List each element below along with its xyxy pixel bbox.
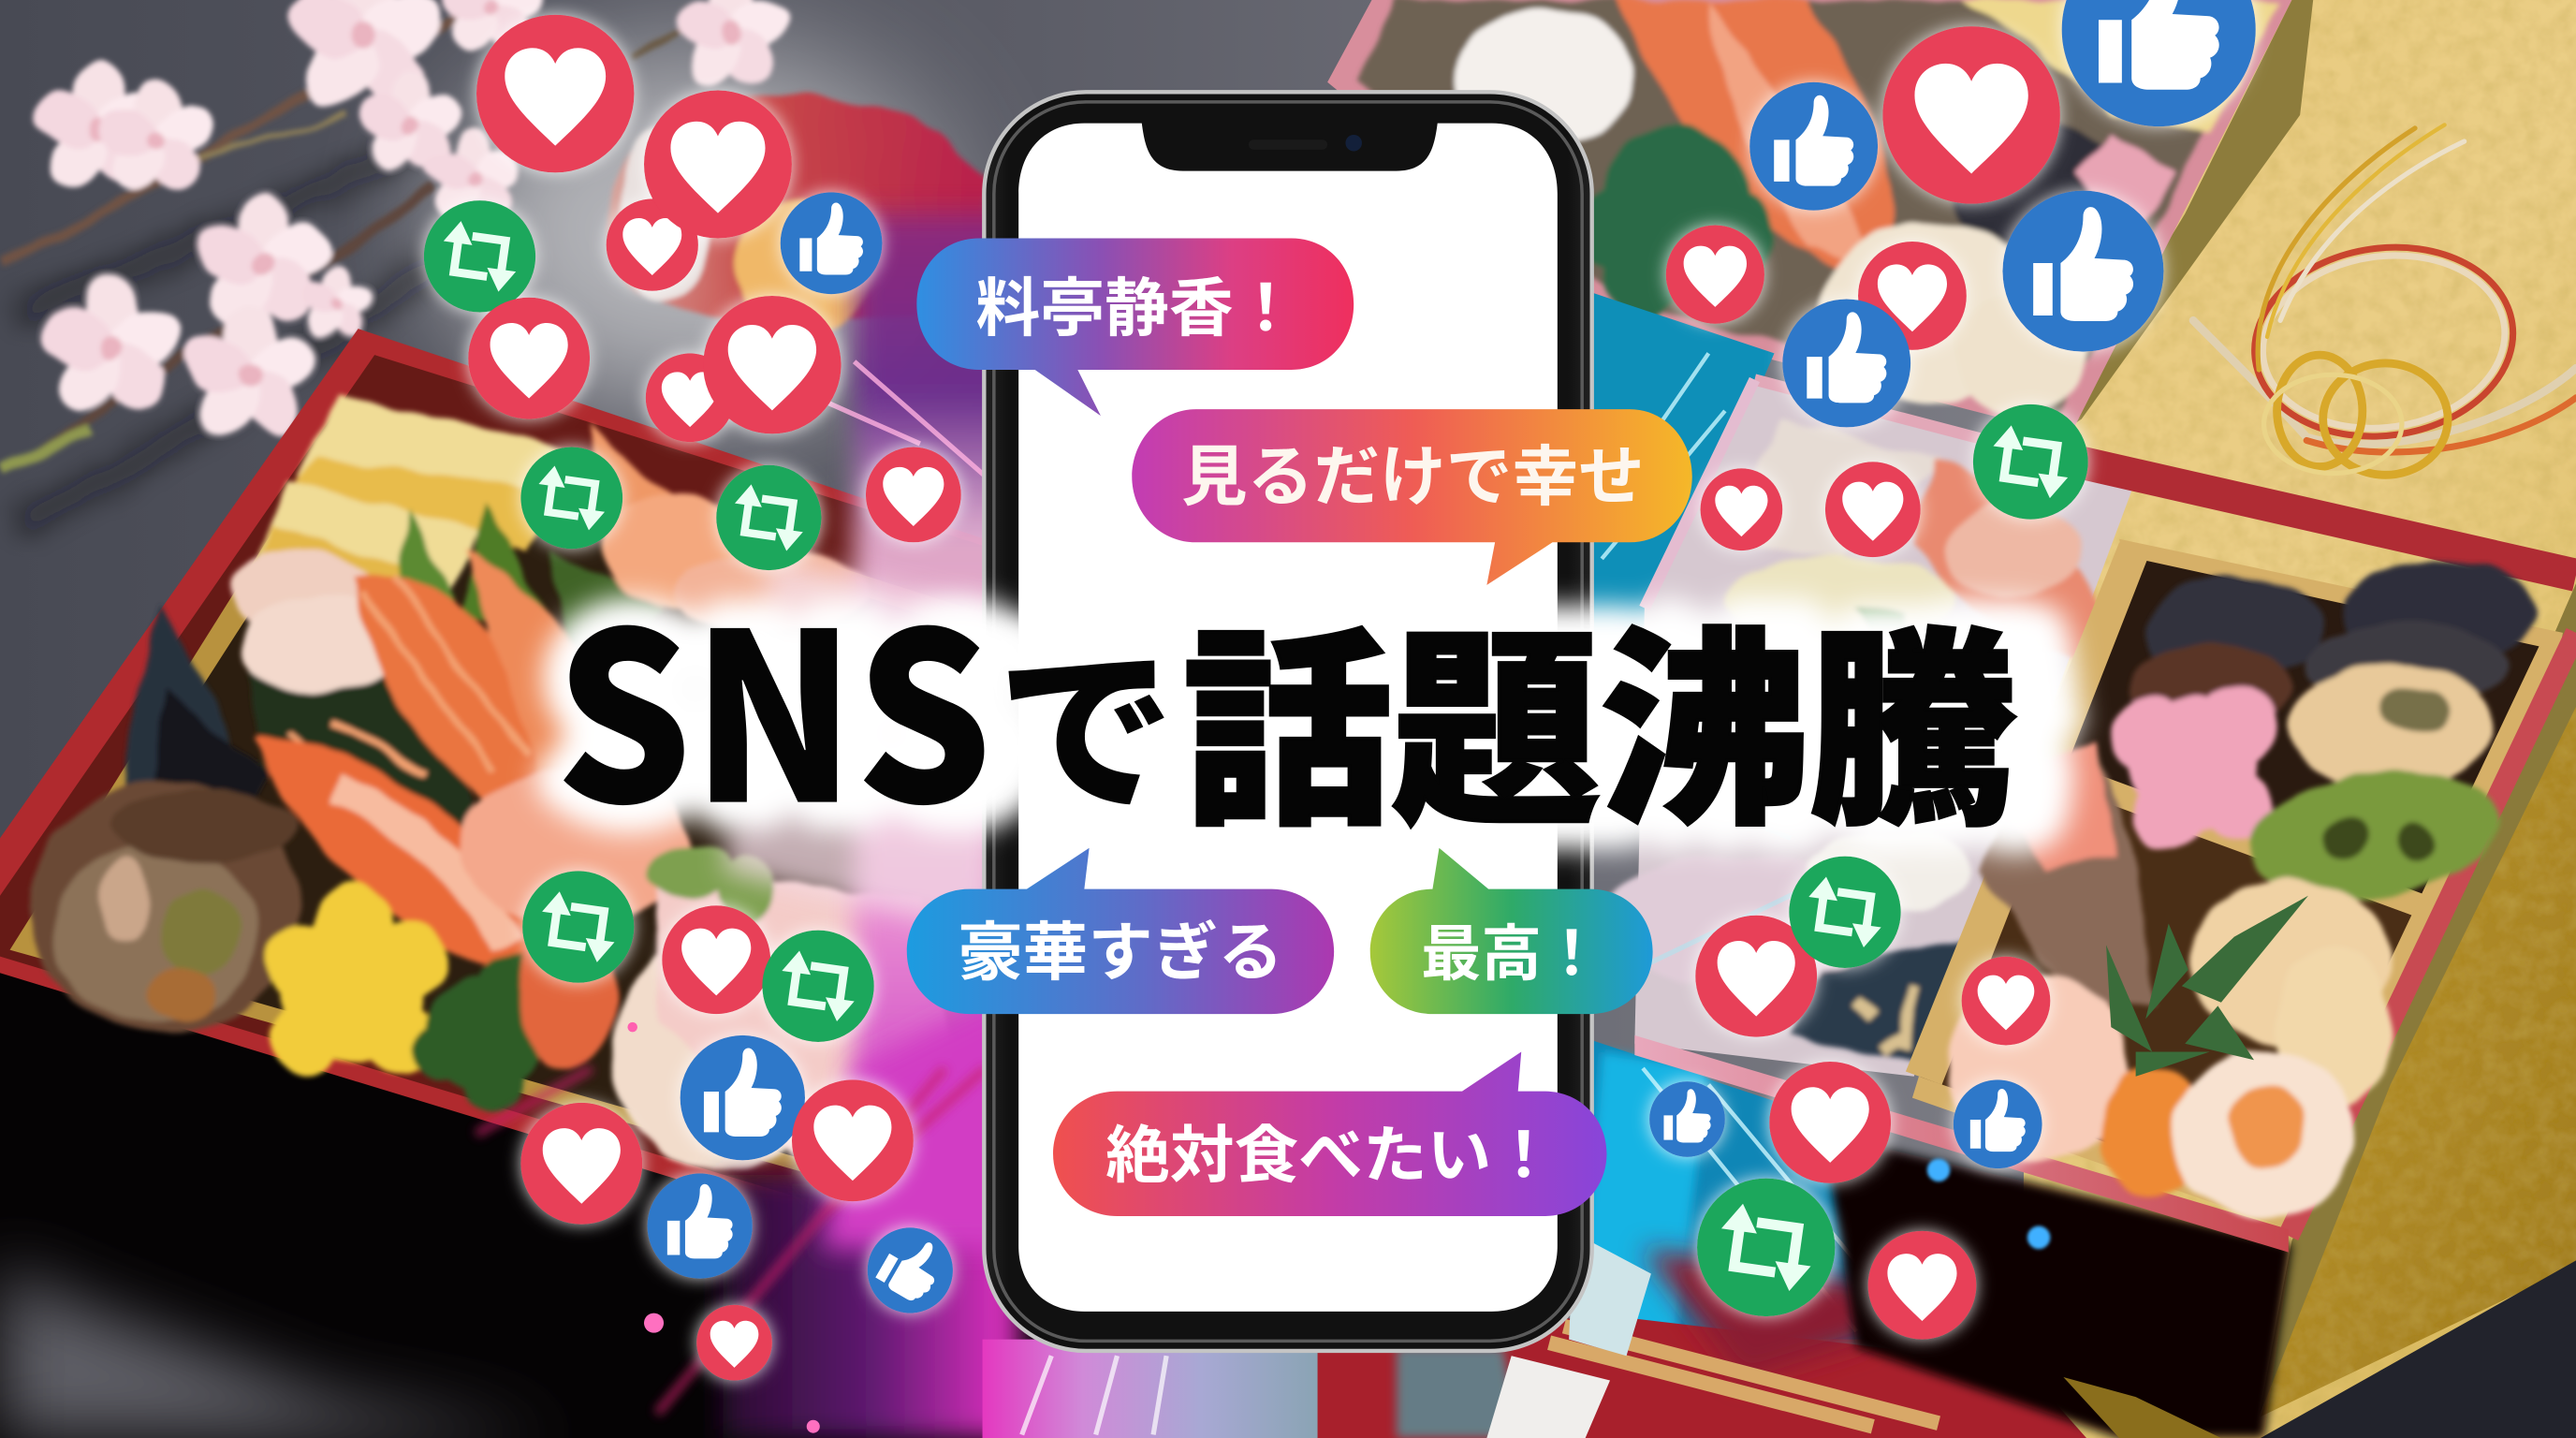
title: で [997, 590, 1175, 847]
box rim [0, 329, 1068, 1299]
reaction icons: left lower cluster [520, 871, 969, 1381]
icon: heart [520, 1103, 642, 1225]
rim bottom [1634, 1035, 2289, 1253]
reaction icons: left upper cluster [424, 15, 961, 570]
speech bubble 絶対食べたい [1053, 1051, 1606, 1216]
meat roll [30, 783, 299, 1032]
rim left pale [1645, 380, 1754, 609]
icon: heart [1825, 462, 1921, 557]
kamaboko [1822, 222, 2039, 403]
gold paper [2021, 0, 2576, 1438]
title: 話題沸騰 [1183, 561, 2017, 866]
icon: heart [1695, 916, 1817, 1037]
upper compartment [2056, 550, 2550, 907]
icon: heart [792, 1079, 914, 1201]
tamago top [1963, 0, 2284, 131]
speech bubble 豪華すぎる [907, 848, 1334, 1014]
lacquer bowl [607, 95, 986, 337]
icon: thumbs up [681, 1035, 805, 1160]
cyan rim highlight [1602, 772, 1808, 986]
speech bubble 最高: 最高！ [1421, 904, 1602, 992]
icon: heart [468, 298, 590, 419]
pink flower [2113, 689, 2277, 850]
icon: heart [1882, 26, 2060, 204]
galaxy glow: left of phone [476, 213, 1318, 1438]
dark fish [124, 605, 246, 805]
smartphone [984, 92, 1592, 1351]
white dish [1454, 10, 1634, 148]
shrimp balls [230, 549, 374, 635]
yellow flower carrot [266, 884, 446, 1078]
icon: heart [866, 447, 961, 542]
foods [30, 394, 970, 1183]
bottom of table: red mat and chopsticks [1318, 1233, 2086, 1438]
speech bubble 絶対食べたい: 絶対食べたい！ [1105, 1106, 1556, 1196]
pale left food area [1634, 380, 2136, 1077]
icon: retweet [1789, 857, 1901, 968]
reaction icons: right upper cluster [1666, 0, 2256, 557]
shrimp and meat [1980, 740, 2156, 1005]
icon: thumbs up tilted [852, 1212, 969, 1328]
right upper bento box [1327, 0, 2291, 435]
reaction icons: right lower cluster [1649, 857, 2050, 1340]
bottom centre lilac streak [983, 1340, 1318, 1438]
orange prawn [353, 573, 592, 840]
green vegetable [2243, 756, 2505, 914]
icon: thumbs up [648, 1173, 753, 1279]
speech bubble 豪華すぎる: 豪華すぎる [958, 901, 1283, 993]
speaker and camera [1249, 135, 1362, 151]
left bento box [0, 329, 1068, 1438]
gold mizuhiki cord [2193, 125, 2576, 475]
seafood and egg in lower compartment [2190, 879, 2393, 1044]
small gold paper triangle [2063, 1377, 2221, 1438]
parsley [411, 953, 546, 1111]
big prawn [255, 739, 550, 971]
pink prawn upper [588, 420, 788, 618]
title halo: kanji: で話題沸騰 [1005, 561, 2056, 866]
rim right [2289, 633, 2576, 1236]
title: white halo: SNS [555, 532, 1032, 870]
icon: retweet [1697, 1179, 1835, 1316]
icon: retweet [424, 200, 535, 313]
icon: heart [696, 1305, 772, 1381]
icon: retweet [716, 465, 822, 570]
box front [0, 961, 1051, 1438]
icon: heart [1868, 1231, 1976, 1340]
icon: heart [703, 296, 842, 433]
title: SNS [555, 532, 992, 870]
sushi rolls [2144, 575, 2324, 681]
cyan galaxy glow: right of phone [1577, 287, 1873, 1340]
tamago roll [2289, 664, 2492, 789]
icon: heart [1962, 957, 2050, 1045]
speech bubble 見るだけで幸せ: 見るだけで幸せ [1181, 425, 1645, 520]
speech bubble 見るだけで幸せ [1132, 409, 1692, 585]
gold dividers [1906, 539, 2576, 1227]
parsley right [1575, 125, 1775, 319]
icon: heart [1858, 242, 1967, 350]
garnish [648, 844, 774, 920]
box front [1823, 1134, 2291, 1438]
background: pale haze behind upper-left icons [444, 50, 936, 411]
icon: retweet [522, 871, 634, 983]
lower compartment [1919, 783, 2435, 1213]
icon: retweet [520, 447, 622, 549]
tamago egg rolls [299, 394, 567, 526]
icon: heart [607, 198, 698, 291]
right main bento box [1602, 380, 2576, 1438]
icon: thumbs up [2062, 0, 2256, 126]
icon: retweet [762, 931, 874, 1042]
icon: heart [476, 15, 634, 172]
icon: thumbs up [1649, 1081, 1725, 1157]
icon: heart [662, 905, 770, 1014]
title [555, 532, 2017, 870]
green leaves [386, 509, 468, 657]
speech bubble 料亭静香 [916, 239, 1354, 416]
icon: thumbs up [2002, 191, 2163, 352]
icon: thumbs up [1749, 82, 1878, 211]
phone screen [1018, 124, 1558, 1312]
icon: retweet [1973, 404, 2088, 520]
icon: thumbs up [1954, 1079, 2042, 1168]
icon: heart [644, 91, 792, 239]
salmon and pale seafood [460, 768, 690, 925]
shrimp top [1618, 0, 1894, 271]
dark sushi [1952, 120, 2123, 258]
icon: heart [646, 353, 735, 442]
icon: heart [1769, 1062, 1891, 1183]
icon: thumbs up [1782, 299, 1910, 427]
rim top [1754, 380, 2012, 447]
cherry blossom branches [0, 0, 795, 526]
icon: heart [1701, 468, 1782, 550]
prawn whiskers [287, 575, 526, 855]
speech bubble 最高 [1370, 848, 1653, 1014]
blue light dots [1927, 1159, 1950, 1181]
speech bubble 料亭静香: 料亭静香！ [976, 257, 1298, 349]
dark leaves between foods [246, 641, 493, 855]
icon: heart [1666, 225, 1764, 324]
icon: thumbs up [781, 192, 882, 294]
leaves [2106, 896, 2308, 1077]
phone body [984, 92, 1592, 1351]
